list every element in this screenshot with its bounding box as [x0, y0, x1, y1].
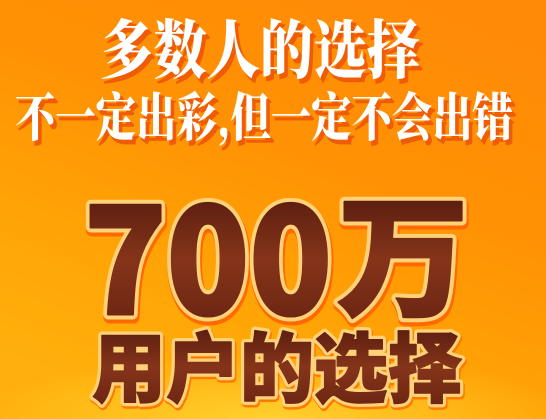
subheading: 用户的选择: 用户的选择 [92, 308, 462, 418]
heading: line one: 多数人的选择 [103, 4, 423, 96]
big number unit: 万: 万 [338, 157, 470, 348]
heading: line one: 多数人的选择 [100, 0, 420, 92]
big number: 700: 700 [84, 146, 332, 357]
subheading: 用户的选择: 用户的选择 [93, 310, 463, 419]
big number: 700: 700 [85, 149, 333, 360]
subheading: 用户的选择: 用户的选择 [92, 308, 462, 418]
big number unit: 万: 万 [337, 154, 469, 345]
big number unit: 万: 万 [337, 154, 469, 345]
big number: 700: 700 [84, 146, 332, 357]
